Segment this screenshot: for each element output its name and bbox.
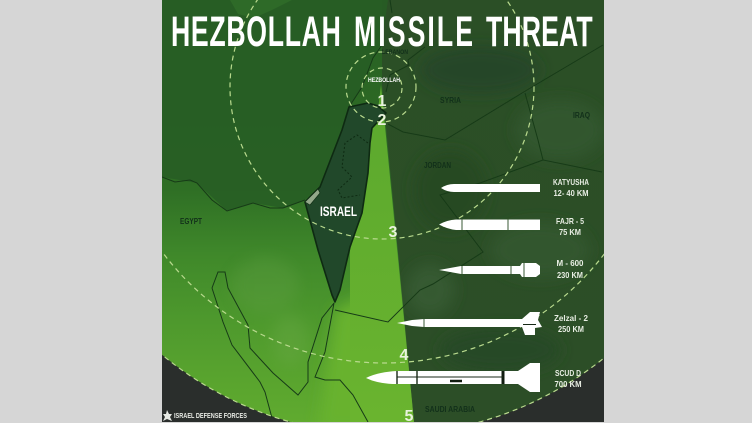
west bank (338, 135, 368, 198)
country labels: LEBANON (382, 50, 408, 56)
mediterranean sea (162, 0, 388, 211)
rocket: katyusha (441, 184, 540, 192)
rocket labels: M - 600 (556, 258, 584, 268)
rocket labels: 75 KM (559, 227, 581, 237)
israel (305, 103, 386, 302)
rocket labels: 230 KM (557, 270, 583, 280)
rocket labels: 700 KM (554, 379, 582, 389)
range numbers: 4 (400, 347, 409, 364)
country labels: SAUDI ARABIA (425, 405, 475, 414)
range numbers (378, 93, 414, 423)
country labels: IRAQ (573, 111, 590, 120)
israel label: ISRAEL (320, 203, 357, 219)
map panel (162, 0, 604, 422)
icon: idf emblem (163, 410, 172, 421)
title: THREAT (486, 8, 593, 56)
rocket labels (553, 177, 589, 389)
country labels: JORDAN (424, 161, 451, 170)
rocket labels: 12- 40 KM (554, 188, 588, 198)
rocket: scud d (366, 363, 540, 392)
range numbers: 1 (378, 93, 387, 110)
rocket labels: SCUD D (555, 368, 581, 378)
rocket: fajr-5 (439, 219, 540, 230)
title: MISSILE (354, 8, 473, 56)
hezbollah label: HEZBOLLAH (368, 78, 400, 84)
range numbers: 3 (389, 224, 398, 241)
israel defense forces logo (163, 410, 247, 421)
rocket labels: KATYUSHA (553, 177, 589, 187)
title (172, 16, 592, 46)
cyprus (230, 0, 292, 18)
missile range wedge (318, 85, 414, 423)
rocket labels: Zelzal - 2 (554, 313, 588, 323)
green land and sea within range (162, 0, 604, 422)
israel territory (305, 103, 386, 302)
rocket labels: FAJR - 5 (556, 216, 584, 226)
rocket: m-600 (439, 263, 540, 277)
country borders (162, 0, 603, 422)
dark area beyond maximum range (162, 354, 604, 422)
israel defense forces logo: ISRAEL DEFENSE FORCES (174, 411, 247, 420)
rocket labels: 250 KM (558, 324, 584, 334)
country labels (180, 50, 590, 414)
title: HEZBOLLAH (171, 8, 341, 56)
country labels: EGYPT (180, 217, 202, 226)
range circles (162, 0, 604, 422)
rocket: zelzal-2 (397, 312, 542, 335)
country labels: SYRIA (440, 96, 461, 105)
range numbers: 2 (378, 112, 387, 129)
gaza strip (305, 189, 320, 205)
